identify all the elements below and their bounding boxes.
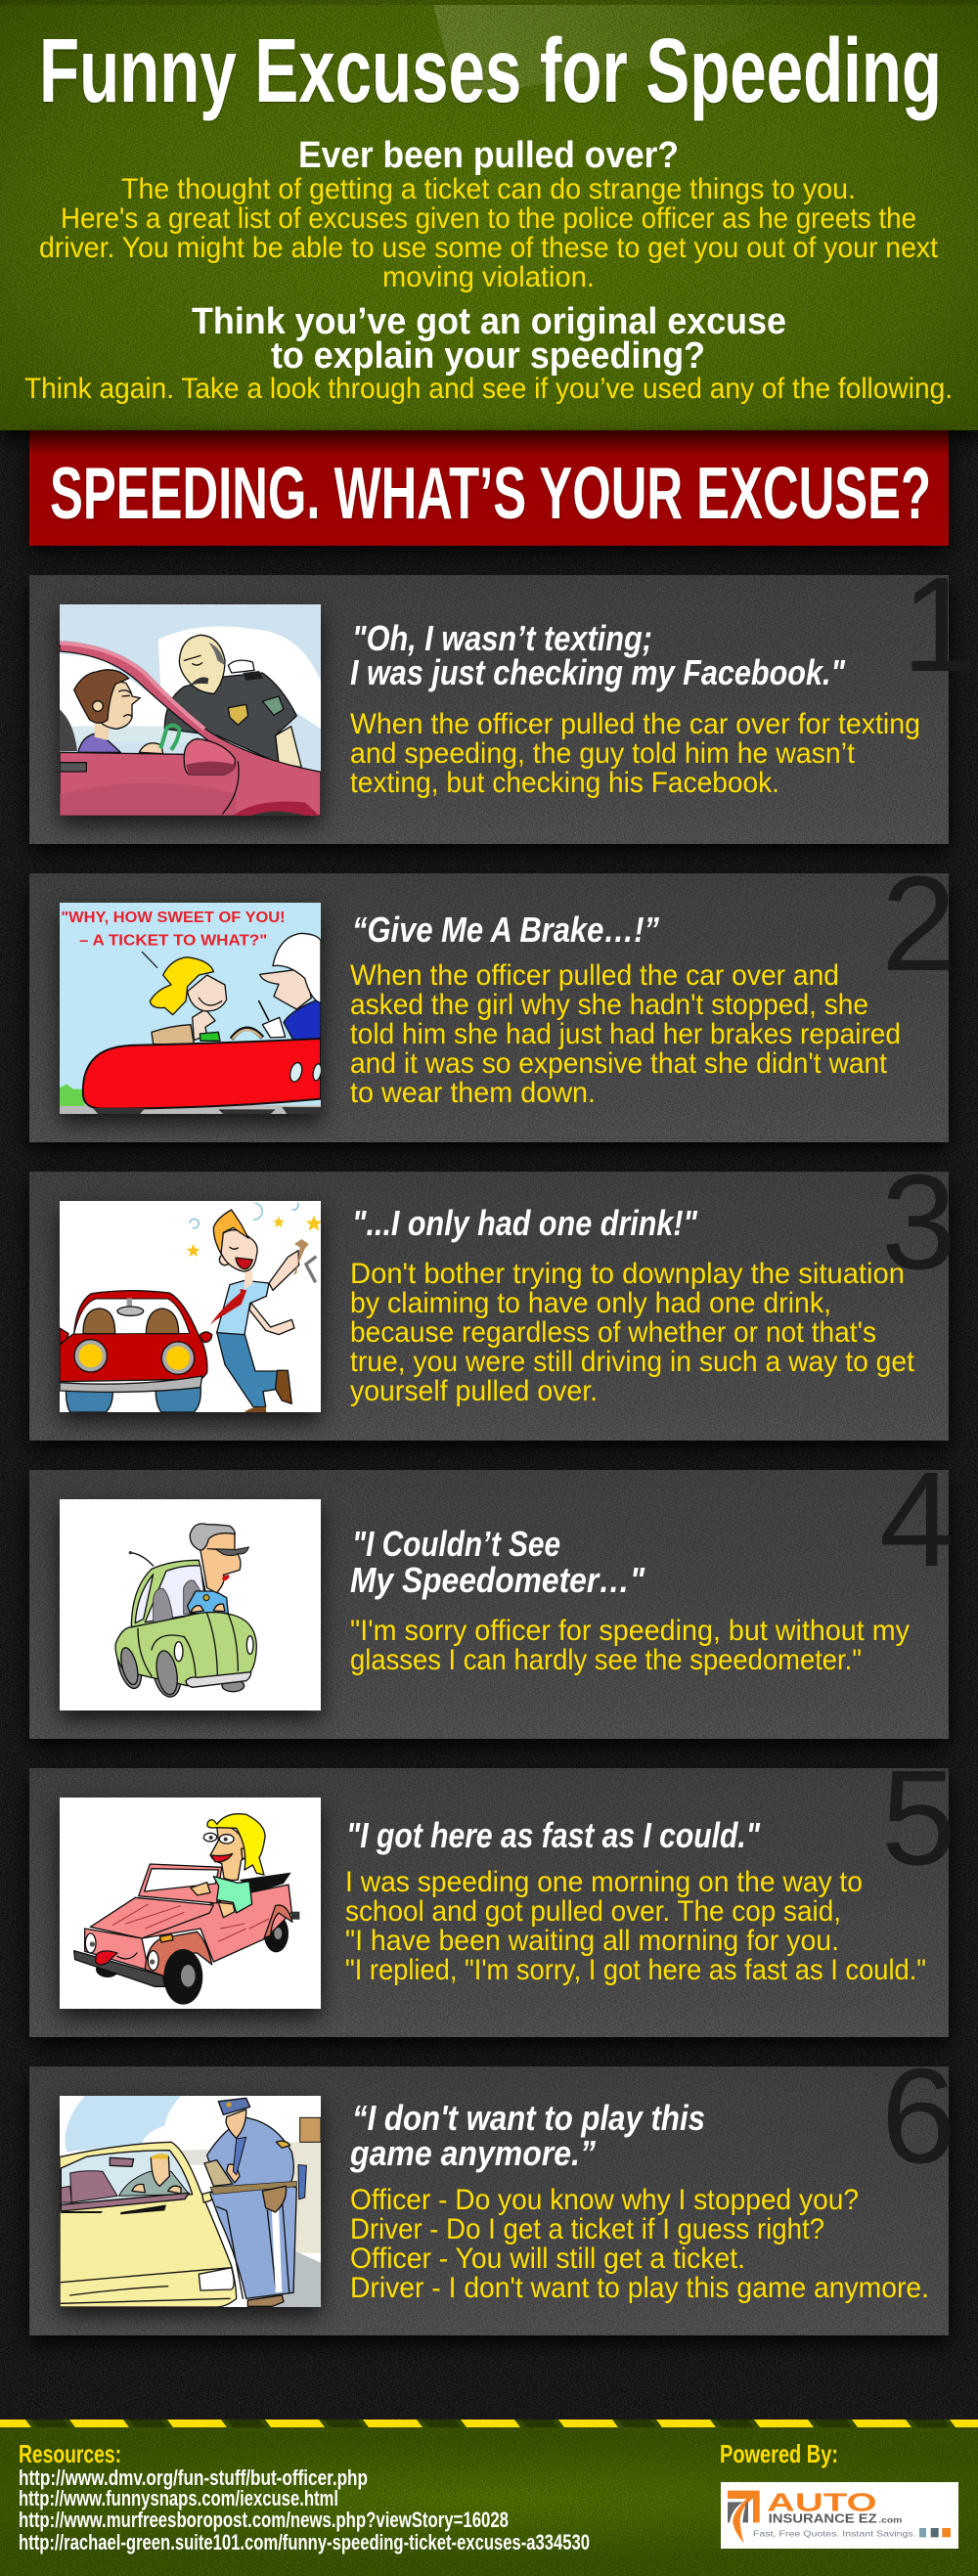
image: drunk man with keys beside red car — [60, 1201, 322, 1412]
number 1: 1 — [902, 550, 977, 700]
number 5: 5 — [881, 1743, 956, 1893]
resources list: Resources: — [19, 2439, 121, 2468]
image: girl in red car with motorcycle cop: "WHY, HOW SWEET OF YOU! — [61, 910, 286, 926]
logo: Auto Insurance EZ: AUTO — [767, 2487, 877, 2516]
logo: Auto Insurance EZ: INSURANCE EZ — [769, 2512, 877, 2526]
intro paragraph: The thought of getting a ticket can do strange things to you. — [121, 173, 856, 205]
image: policeman writing ticket at yellow car — [60, 2096, 321, 2307]
intro paragraph: Here's a great list of excuses given to the police officer as he greets the — [61, 202, 916, 235]
excuse 2 body: to wear them down. — [350, 1077, 596, 1109]
hazard stripe — [0, 2420, 978, 2427]
excuse 2 body — [350, 959, 901, 1109]
excuse 1 heading: "Oh, I wasn’t texting; — [352, 618, 652, 658]
image: girl in red car with motorcycle cop: – A TICKET TO WHAT?" — [79, 932, 267, 949]
panel: excuse 6 — [29, 2041, 956, 2335]
excuse 1 body: When the officer pulled the car over for texting — [350, 708, 920, 740]
excuse 1 body — [350, 708, 920, 799]
resources list: http://www.murfreesboropost.com/news.php?viewStory=16028 — [19, 2508, 509, 2532]
excuse 3 body: by claiming to have only had one drink, — [350, 1287, 831, 1319]
excuse 1 body: texting, but checking his Facebook. — [350, 767, 779, 799]
logo: Auto Insurance EZ: .com — [878, 2515, 903, 2525]
excuse 6 body — [350, 2184, 929, 2304]
excuse 3 body — [350, 1258, 915, 1407]
excuse 2 body: asked the girl why she hadn't stopped, she — [350, 989, 868, 1021]
header panel — [0, 0, 978, 430]
excuse 6 heading: game anymore.” — [349, 2133, 596, 2173]
excuse 4 heading: "I Couldn’t See — [352, 1524, 560, 1564]
excuse 4 body: "I'm sorry officer for speeding, but without my — [350, 1615, 910, 1647]
panel: excuse 5 — [29, 1743, 956, 2037]
panel: excuse 4 — [29, 1444, 955, 1739]
excuse 6 body: Officer - Do you know why I stopped you? — [350, 2184, 859, 2216]
excuse 4 body — [350, 1615, 910, 1676]
excuse 4 body: glasses I can hardly see the speedometer." — [350, 1644, 862, 1676]
number 6: 6 — [881, 2041, 956, 2192]
number 2: 2 — [881, 849, 956, 999]
excuse 6 heading — [349, 2098, 705, 2173]
excuse 3 body: yourself pulled over. — [350, 1375, 598, 1407]
excuse 2 body: told him she had just had her brakes repaired — [350, 1018, 901, 1050]
excuse 3 body: true, you were still driving in such a way to get — [350, 1346, 915, 1378]
excuse 6 body: Driver - I don't want to play this game anymore. — [350, 2272, 929, 2304]
resources list: http://www.funnysnaps.com/iexcuse.html — [19, 2486, 338, 2510]
excuse 3 body: Don't bother trying to downplay the situation — [350, 1258, 905, 1290]
excuse 4 heading — [350, 1524, 645, 1600]
resources list: http://rachael-green.suite101.com/funny-speeding-ticket-excuses-a334530 — [19, 2530, 590, 2554]
subheading: original excuse: Think you’ve got an original excuse — [192, 301, 786, 342]
excuse 2 body: When the officer pulled the car over and — [350, 959, 839, 992]
excuse 6 body: Driver - Do I get a ticket if I guess right? — [350, 2213, 824, 2245]
image: old lady in green beetle — [60, 1499, 321, 1710]
footer panel — [0, 2420, 978, 2576]
excuse 2 heading: “Give Me A Brake…!” — [352, 910, 659, 950]
resources list — [19, 2439, 590, 2554]
excuse 5 body — [345, 1866, 926, 1986]
subheading: original excuse: to explain your speeding? — [271, 335, 705, 377]
excuse 5 body: I was speeding one morning on the way to — [345, 1866, 863, 1898]
logo: Auto Insurance EZ: Fast, Free Quotes. Instant Savings. — [753, 2528, 916, 2538]
excuse 5 body: "I replied, "I'm sorry, I got here as fast as I could." — [345, 1954, 926, 1986]
excuse 1 heading — [350, 618, 846, 692]
excuse 1 heading: I was just checking my Facebook." — [350, 652, 846, 692]
intro paragraph — [39, 173, 939, 293]
excuse 2 body: and it was so expensive that she didn't want — [350, 1047, 888, 1080]
excuse 6 heading: “I don't want to play this — [352, 2098, 705, 2138]
subheading: original excuse — [192, 301, 786, 377]
excuse 5 heading: "I got here as fast as I could." — [346, 1815, 761, 1855]
excuse 5 body: "I have been waiting all morning for you. — [345, 1925, 839, 1957]
excuse 6 body: Officer - You will still get a ticket. — [350, 2243, 745, 2275]
intro paragraph: moving violation. — [382, 261, 595, 293]
excuse 4 heading: My Speedometer…" — [350, 1560, 645, 1600]
image: officer at car window — [60, 604, 321, 816]
panel: excuse 3 — [29, 1147, 956, 1441]
excuse 3 heading: "...I only had one drink!" — [352, 1203, 698, 1243]
excuse 3 body: because regardless of whether or not that's — [350, 1316, 876, 1349]
red banner — [29, 430, 949, 546]
excuse 5 body: school and got pulled over. The cop said, — [345, 1895, 841, 1928]
image: girl in red car with motorcycle cop — [60, 903, 323, 1114]
resources list: http://www.dmv.org/fun-stuff/but-officer.php — [19, 2465, 368, 2490]
powered by label: Powered By: — [720, 2439, 838, 2468]
subheading: ever been pulled over: Ever been pulled over? — [298, 135, 679, 176]
number 3: 3 — [881, 1147, 956, 1298]
panel: excuse 2 — [29, 849, 956, 1142]
panel: excuse 1 — [29, 550, 977, 844]
image: blonde woman in pink convertible — [60, 1798, 321, 2009]
logo: Auto Insurance EZ — [721, 2482, 958, 2549]
intro paragraph: driver. You might be able to use some of these to get you out of your next — [39, 232, 939, 264]
excuse 1 body: and speeding, the guy told him he wasn’t — [350, 737, 856, 770]
number 4: 4 — [879, 1444, 955, 1595]
